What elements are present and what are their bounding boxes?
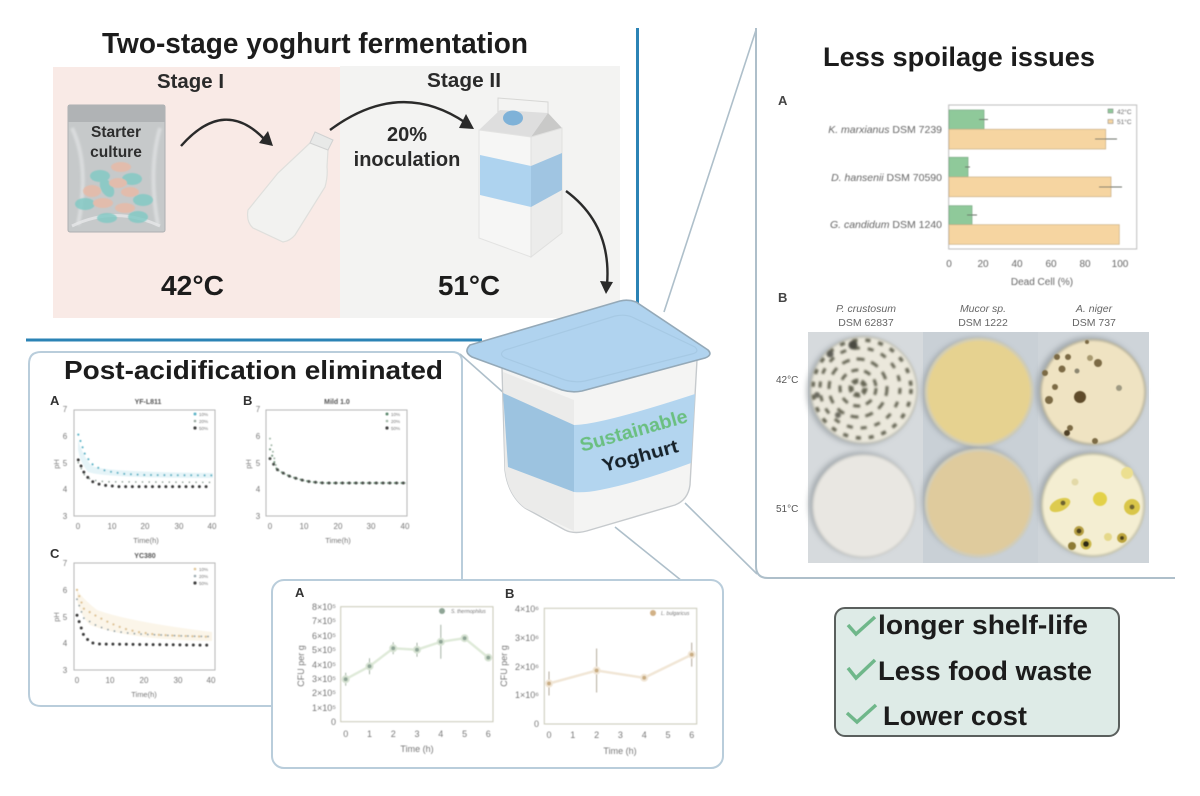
chart: dead cell bars: 42°C xyxy=(1117,108,1132,116)
chart C: YC380 pH: 30 xyxy=(174,676,183,685)
plate column labels: P. crustosum xyxy=(836,303,896,315)
chart: dead cell bars: 100 xyxy=(1112,259,1129,270)
label: chart C: C xyxy=(50,546,60,561)
chart C: YC380 pH: pH xyxy=(52,612,61,622)
label: Sustainable: Sustainable xyxy=(578,407,690,457)
chart A: YF-L811 pH: 7 xyxy=(63,405,68,414)
heading: less spoilage: Less spoilage issues xyxy=(823,42,1095,72)
plate texture: A. niger 51°C colonies xyxy=(1047,467,1140,550)
chart A: YF-L811 pH: 4 xyxy=(63,485,68,494)
chart: dead cell bars xyxy=(828,105,1137,288)
chart B: Mild 1.0 pH: Time(h) xyxy=(325,536,351,545)
chart C: YC380 pH xyxy=(52,553,216,699)
chart B: Mild 1.0 pH: pH xyxy=(244,459,253,469)
chart B: L. bulgaricus CFU: 3×10⁶ xyxy=(515,633,539,643)
chart B: Mild 1.0 pH xyxy=(244,399,410,545)
arrow: carton to yoghurt xyxy=(566,191,613,294)
plate column labels: Mucor sp. xyxy=(960,303,1006,315)
chart A: S. thermophilus CFU: S. thermophilus xyxy=(451,609,486,615)
chart A: YF-L811 pH: 0 xyxy=(76,522,81,531)
plate column labels: A. niger xyxy=(1075,303,1113,315)
icon: bottle xyxy=(248,132,333,242)
chart A: S. thermophilus CFU: 1×10⁵ xyxy=(312,703,336,713)
chart C: YC380 pH: 20 xyxy=(140,676,149,685)
chart: dead cell bars: 40 xyxy=(1011,259,1023,270)
chart A: YF-L811 pH: 50% xyxy=(199,426,208,431)
chart B: L. bulgaricus CFU: 2 xyxy=(594,730,599,740)
chart C: YC380 pH: Time(h) xyxy=(131,690,157,699)
chart A: S. thermophilus CFU: 4×10⁵ xyxy=(312,660,336,670)
icon: milk carton xyxy=(479,98,562,257)
chart B: Mild 1.0 pH: 5 xyxy=(256,459,261,468)
plate texture: A. niger 42°C colonies xyxy=(1042,340,1122,444)
label: A: A xyxy=(295,585,305,600)
chart B: L. bulgaricus CFU: 1×10⁶ xyxy=(515,690,539,700)
chart A: YF-L811 pH: 6 xyxy=(63,432,68,441)
chart A: S. thermophilus CFU: CFU per g xyxy=(296,645,306,687)
chart A: YF-L811 pH: 20 xyxy=(141,522,150,531)
chart B: L. bulgaricus CFU: 3 xyxy=(618,730,623,740)
chart A: YF-L811 pH: 30 xyxy=(175,522,184,531)
chart C: YC380 pH: 5 xyxy=(63,613,68,622)
chart B: L. bulgaricus CFU xyxy=(499,604,697,756)
arrow: bottle to carton xyxy=(330,102,474,130)
chart B: L. bulgaricus CFU: 6 xyxy=(689,730,694,740)
chart A: YF-L811 pH xyxy=(52,399,217,545)
stage II background xyxy=(340,66,620,318)
plate row label: 51°C: 51°C xyxy=(776,504,798,515)
chart C: YC380 pH: 4 xyxy=(63,639,68,648)
heading: stage I: Stage I xyxy=(157,71,224,93)
chart: dead cell bars: 60 xyxy=(1045,259,1057,270)
lid xyxy=(467,300,710,392)
chart B: Mild 1.0 pH: 0 xyxy=(268,522,273,531)
panel: post-acidification outline xyxy=(29,352,462,706)
title: two-stage: Two-stage yoghurt fermentation xyxy=(102,28,528,60)
chart C: YC380 pH: 10 xyxy=(106,676,115,685)
text: lower cost: Lower cost xyxy=(883,701,1027,731)
chart: dead cell bars: 0 xyxy=(946,259,952,270)
label: Yoghurt: Yoghurt xyxy=(600,435,680,476)
chart B: L. bulgaricus CFU: L. bulgaricus xyxy=(661,611,690,617)
chart A: YF-L811 pH: 5 xyxy=(63,459,68,468)
text: 20% inoculation: inoculation xyxy=(354,149,460,171)
chart B: L. bulgaricus CFU: 0 xyxy=(534,719,539,729)
label: chart B: B xyxy=(243,393,252,408)
chart A: S. thermophilus CFU: 4 xyxy=(438,729,443,739)
chart A: S. thermophilus CFU: 3 xyxy=(414,729,420,739)
chart C: YC380 pH: 6 xyxy=(63,586,68,595)
chart B: Mild 1.0 pH: 10 xyxy=(300,522,309,531)
heading: stage II: Stage II xyxy=(427,70,501,92)
chart B: L. bulgaricus CFU: CFU per g xyxy=(499,645,509,687)
callout: benefits xyxy=(835,608,1119,736)
connectors to yoghurt xyxy=(460,30,757,581)
chart A: YF-L811 pH: 10 xyxy=(108,522,117,531)
chart A: S. thermophilus CFU: 2×10⁵ xyxy=(312,688,336,698)
label: 51°C: 51°C xyxy=(438,270,500,301)
chart A: S. thermophilus CFU: 6×10⁵ xyxy=(312,631,336,641)
divider frame: blue lines xyxy=(26,28,638,340)
check mark 3 xyxy=(847,705,876,722)
chart A: YF-L811 pH: YF-L811 xyxy=(135,399,162,406)
chart A: YF-L811 pH: 40 xyxy=(208,522,217,531)
chart A: YF-L811 pH: Time(h) xyxy=(133,536,159,545)
chart B: Mild 1.0 pH: 20% xyxy=(391,419,400,424)
text: 20% inoculation: 20% xyxy=(387,124,427,146)
chart A: S. thermophilus CFU xyxy=(296,602,493,754)
label: starter culture: culture xyxy=(90,144,142,161)
chart B: Mild 1.0 pH: 20 xyxy=(334,522,343,531)
chart: dead cell bars: 51°C xyxy=(1117,118,1132,126)
plate texture: P. crustosum rings xyxy=(813,340,911,438)
plate shadows xyxy=(807,337,1144,556)
chart B: Mild 1.0 pH: 10% xyxy=(391,412,400,417)
chart C: YC380 pH: 3 xyxy=(63,666,68,675)
cup band front xyxy=(574,394,695,492)
cup side shade xyxy=(503,372,574,531)
chart B: Mild 1.0 pH: 50% xyxy=(391,426,400,431)
chart A: YF-L811 pH: 10% xyxy=(199,412,208,417)
chart B: L. bulgaricus CFU: 0 xyxy=(546,730,552,740)
plate row label: 42°C: 42°C xyxy=(776,375,798,386)
chart B: L. bulgaricus CFU: 1 xyxy=(570,730,575,740)
label: B: B xyxy=(505,586,514,601)
chart A: S. thermophilus CFU: 0 xyxy=(331,717,336,727)
chart C: YC380 pH: 20% xyxy=(199,574,208,579)
panel: CFU charts xyxy=(272,580,723,768)
lid inner contour xyxy=(502,315,697,382)
chart C: YC380 pH: YC380 xyxy=(134,553,156,560)
chart B: L. bulgaricus CFU: 4 xyxy=(642,730,647,740)
cup body xyxy=(502,330,697,532)
chart B: L. bulgaricus CFU: Time (h) xyxy=(603,746,637,756)
stage I background xyxy=(53,67,340,318)
chart B: L. bulgaricus CFU: 4×10⁶ xyxy=(515,604,539,614)
chart B: Mild 1.0 pH: 4 xyxy=(256,485,261,494)
label: chart A: A xyxy=(50,393,60,408)
chart A: S. thermophilus CFU: 6 xyxy=(486,729,491,739)
chart A: YF-L811 pH: 20% xyxy=(199,419,208,424)
photo: petri plates xyxy=(807,332,1149,563)
label: starter culture: Starter xyxy=(91,124,141,141)
chart C: YC380 pH: 7 xyxy=(63,559,68,568)
chart A: S. thermophilus CFU: 5 xyxy=(462,729,467,739)
chart: dead cell bars: 20 xyxy=(977,259,989,270)
chart A: S. thermophilus CFU: 8×10⁵ xyxy=(312,602,336,612)
text: longer shelf-life: longer shelf-life xyxy=(878,610,1088,640)
icon: starter culture bag xyxy=(68,105,165,232)
chart C: YC380 pH: 0 xyxy=(75,676,80,685)
heading: post-acidification: Post-acidification eliminated xyxy=(64,355,443,385)
chart A: S. thermophilus CFU: Time (h) xyxy=(400,744,434,754)
cup band left xyxy=(503,393,574,492)
label: panel B: B xyxy=(778,290,787,305)
chart: dead cell bars: G. candidum DSM 1240 xyxy=(830,219,942,231)
chart A: YF-L811 pH: 3 xyxy=(63,512,68,521)
chart B: Mild 1.0 pH: Mild 1.0 xyxy=(324,399,350,406)
plate column labels: DSM 1222 xyxy=(958,317,1008,329)
chart: dead cell bars: K. marxianus DSM 7239 xyxy=(828,124,942,136)
chart C: YC380 pH: 50% xyxy=(199,581,208,586)
chart A: S. thermophilus CFU: 1 xyxy=(367,729,372,739)
chart: dead cell bars: D. hansenii DSM 70590 xyxy=(831,172,942,184)
panel: spoilage outline xyxy=(756,28,1175,578)
chart A: S. thermophilus CFU: 5×10⁵ xyxy=(312,645,336,655)
chart B: L. bulgaricus CFU: 5 xyxy=(665,730,671,740)
chart A: S. thermophilus CFU: 0 xyxy=(343,729,348,739)
chart B: Mild 1.0 pH: 30 xyxy=(367,522,376,531)
chart C: YC380 pH: 10% xyxy=(199,567,208,572)
icon: yoghurt cup xyxy=(467,300,710,532)
check mark 1 xyxy=(848,617,875,634)
chart A: S. thermophilus CFU: 7×10⁵ xyxy=(312,616,336,626)
chart: dead cell bars: Dead Cell (%) xyxy=(1011,277,1073,288)
check mark 2 xyxy=(848,660,875,678)
plate column labels: DSM 737 xyxy=(1072,317,1116,329)
chart B: Mild 1.0 pH: 3 xyxy=(256,512,261,521)
chart A: S. thermophilus CFU: 3×10⁵ xyxy=(312,674,336,684)
chart B: Mild 1.0 pH: 7 xyxy=(256,405,261,414)
chart B: L. bulgaricus CFU: 2×10⁶ xyxy=(515,662,539,672)
chart C: YC380 pH: 40 xyxy=(207,676,216,685)
text: less food waste: Less food waste xyxy=(878,656,1092,686)
label: 42°C: 42°C xyxy=(161,270,224,301)
chart B: Mild 1.0 pH: 6 xyxy=(256,432,261,441)
chart: dead cell bars: 80 xyxy=(1079,259,1091,270)
arrow: bag to bottle xyxy=(181,120,273,146)
label: panel A: A xyxy=(778,93,788,108)
panel: two-stage fermentation xyxy=(26,28,638,340)
plate column labels: DSM 62837 xyxy=(838,317,894,329)
chart B: Mild 1.0 pH: 40 xyxy=(401,522,410,531)
chart A: YF-L811 pH: pH xyxy=(52,459,61,469)
chart A: S. thermophilus CFU: 2 xyxy=(391,729,396,739)
plate column labels xyxy=(836,303,1116,329)
